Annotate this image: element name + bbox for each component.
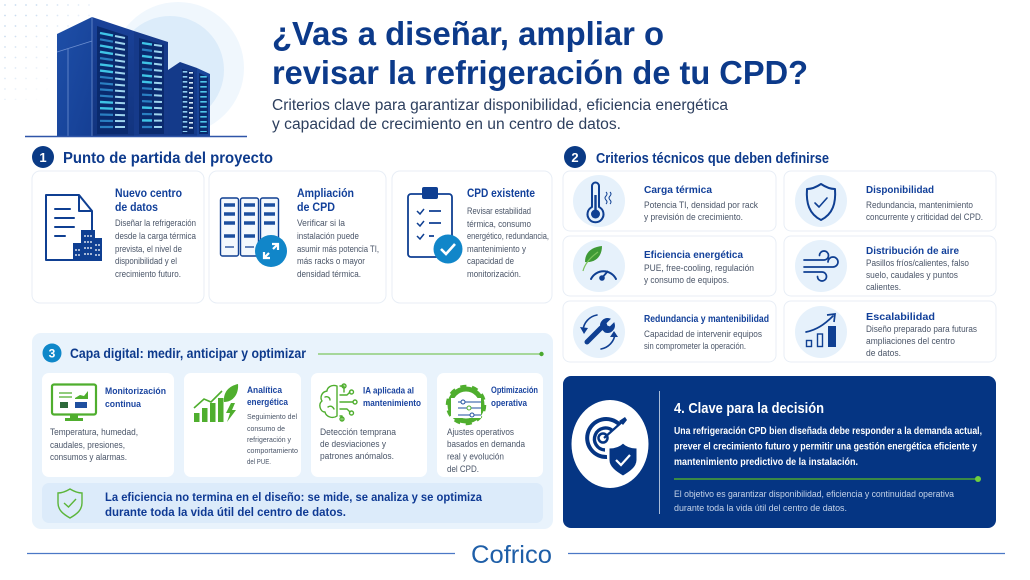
card text: Redundancia, mantenimiento [866,200,973,210]
card text [644,313,769,351]
card text: capacidad de [467,256,514,266]
card text: energético, redundancia, [467,231,549,241]
card text: patrones anómalos. [320,451,394,461]
subtitle [272,97,728,133]
card: analítica energética [184,373,301,477]
card text: Disponibilidad [866,184,934,196]
card text: consumo de [247,424,285,433]
card: optimización operativa [437,373,543,477]
card text: Diseñar la refrigeración [115,218,196,228]
card text: y consumo de equipos. [644,275,729,285]
card text [644,249,754,285]
card text: del CPD. [447,464,479,474]
card text [467,186,549,279]
title [272,15,808,91]
panel: ampliación de CPD [209,171,386,303]
panel: disponibilidad [784,171,996,231]
card text [297,186,379,279]
icon: gear with sliders [448,386,484,424]
icon: target with shield [572,400,648,488]
card text: Nuevo centro [115,186,182,200]
card text: más racks o mayor [297,256,365,266]
heading: section 2 [564,146,829,168]
card text: sin comprometer la operación. [644,341,746,351]
card text: concurrente y criticidad del CPD. [866,212,983,222]
panel: capa digital [32,333,553,529]
card text: CPD existente [467,186,535,200]
card text: energética [247,397,289,408]
callout: eficiencia [42,483,543,523]
card text: crecimiento futuro. [115,269,181,279]
card text: Redundancia y mantenibilidad [644,313,769,325]
card text: Revisar estabilidad [467,206,531,216]
card text: real y evolución [447,452,504,462]
panel: nuevo centro de datos [32,171,204,303]
icon: green chart with leaf [194,384,238,422]
card text: continua [105,399,142,410]
card text: IA aplicada al [363,386,414,396]
icon: thermometer [588,183,611,222]
heading: section 1 [32,146,273,168]
panel: escalabilidad [784,301,996,362]
objective text: El objetivo es garantizar disponibilidad, eficiencia y continuidad operativa [674,489,954,499]
callout text [105,490,482,519]
objective text [674,489,954,513]
heading: section 4: 4. Clave para la decisión [674,400,824,417]
card text: disponibilidad y el [115,256,177,266]
icon: brain circuit [320,384,357,421]
card text: ampliaciones del centro [866,336,955,346]
card text: Ampliación [297,186,354,200]
card text: mantenimiento y [467,244,526,254]
card: monitorización continua [42,373,174,477]
card text: densidad térmica. [297,269,361,279]
decision text: mantenimiento predictivo de la instalación. [674,456,858,468]
card text [866,311,977,358]
card text: operativa [491,398,528,408]
icon: leaf and gauge [583,246,616,281]
card text: desde la carga térmica [115,231,196,241]
card: IA aplicada al mantenimiento [311,373,427,477]
card text: del PUE. [247,457,271,466]
card text: Eficiencia energética [644,249,743,261]
card text: Capacidad de intervenir equipos [644,329,762,339]
panel: distribución de aire [784,236,996,296]
subtitle: y capacidad de crecimiento en un centro de datos. [272,116,621,133]
card text: Escalabilidad [866,311,935,323]
panel: redundancia y mantenibilidad [563,301,776,362]
card text: Optimización [491,385,538,395]
heading: section 3: 3 [49,346,56,360]
card text: refrigeración y [247,435,291,444]
card text: de datos [115,200,158,214]
heading: section 1: Punto de partida del proyecto [63,150,273,167]
card text [247,385,298,466]
card text [50,386,166,462]
card text: de CPD [297,200,335,214]
icon: shield with check [807,184,835,220]
card text: Analítica [247,385,283,396]
card text: consumos y alarmas. [50,452,127,462]
decision text: prever el crecimiento futuro y permitir una gestión energética eficiente y [674,440,977,452]
icon: clipboard with check [408,187,462,264]
card text: Diseño preparado para futuras [866,324,977,334]
card text: comportamiento [247,446,298,455]
card text: Carga térmica [644,184,712,196]
callout text: durante toda la vida útil del centro de datos. [105,505,346,519]
card text: Distribución de aire [866,245,959,257]
callout text: La eficiencia no termina en el diseño: se mide, se analiza y se optimiza [105,490,482,504]
card text: Detección temprana [320,427,396,437]
title: ¿Vas a diseñar, ampliar o [272,15,664,52]
card text [447,385,538,474]
card text: Potencia TI, densidad por rack [644,200,758,210]
card text: basados en demanda [447,439,525,449]
card text [866,245,969,292]
decision text [674,425,982,468]
card text: Verificar si la [297,218,345,228]
heading: section 3 [42,344,306,362]
card text [115,186,196,279]
card text: suelo, caudales y puntos [866,270,958,280]
card text: Temperatura, humedad, [50,427,138,437]
card text: térmica, consumo [467,219,531,229]
icon: green shield [58,489,82,518]
card text: de desviaciones y [320,439,386,449]
icon: growth bars [806,314,836,347]
footer with logo: Cofrico [471,541,552,569]
card text: PUE, free-cooling, regulación [644,263,754,273]
card text: Monitorización [105,386,166,397]
card text: prevista, el nivel de [115,244,182,254]
icon: monitor [52,384,96,421]
card text [644,184,758,222]
panel: eficiencia energética [563,236,776,296]
title: revisar la refrigeración de tu CPD? [272,54,808,91]
icon: document with buildings [46,195,102,261]
card text: Ajustes operativos [447,427,514,437]
card text: asumir más potencia TI, [297,244,379,254]
card text: y previsión de crecimiento. [644,212,743,222]
icon: wrench with cycle arrows [580,315,618,349]
card text: mantenimiento [363,398,421,409]
card text [866,184,983,222]
card text: instalación puede [297,231,359,241]
panel: carga térmica [563,171,776,231]
card text [320,386,421,461]
heading: section 3: Capa digital: medir, anticipar y optimizar [70,345,306,361]
icon: wind [804,251,838,281]
card text: Pasillos fríos/calientes, falso [866,258,969,268]
card text: monitorización. [467,269,521,279]
heading: section 1: 1 [39,150,47,165]
panel: clave para la decisión [563,376,996,528]
objective text: durante toda la vida útil del centro de datos. [674,503,847,513]
heading: section 2: Criterios técnicos que deben definirse [596,151,829,167]
subtitle: Criterios clave para garantizar disponibilidad, eficiencia energética [272,97,728,114]
panel: CPD existente [392,171,552,303]
heading: section 2: 2 [571,150,579,165]
card text: de datos. [866,348,901,358]
card text: calientes. [866,282,901,292]
card text: caudales, presiones, [50,440,125,450]
card text: Seguimiento del [247,412,297,421]
header illustration: data center racks [0,0,247,136]
icon: racks with expand badge [220,198,287,267]
